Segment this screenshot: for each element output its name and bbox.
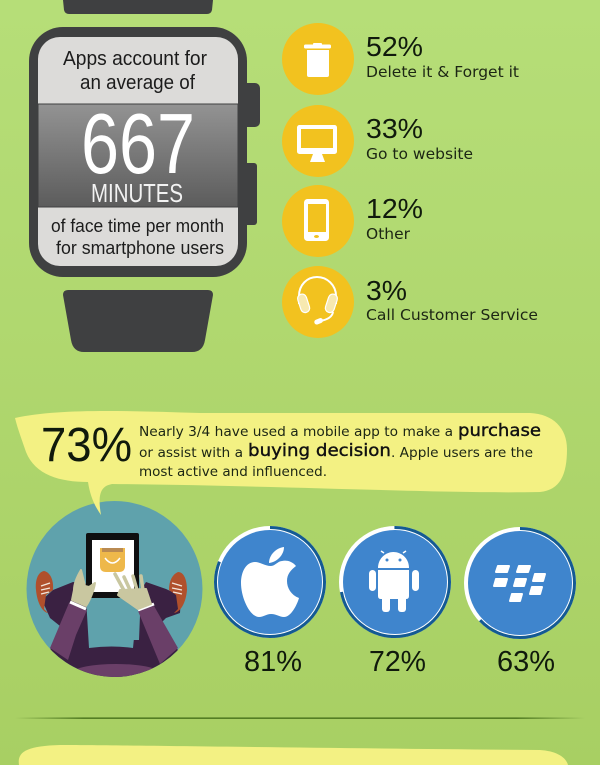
platform: apple <box>214 526 326 678</box>
minutes number: 667 <box>81 97 195 192</box>
label: Delete it & Forget it <box>366 63 519 81</box>
percentage: 72% <box>369 646 426 678</box>
icon: trash can <box>282 23 354 95</box>
bubble text: or assist with a <box>139 445 243 461</box>
watch <box>29 0 260 352</box>
label: Go to website <box>366 145 473 163</box>
percentage: 12% <box>366 193 423 224</box>
platform: android <box>339 526 451 678</box>
progress ring 72% <box>339 526 451 638</box>
bubble text: Nearly 3/4 have used a mobile app to make a <box>139 424 453 440</box>
progress ring 63% <box>464 527 576 639</box>
watch case <box>29 27 247 277</box>
cuffs <box>70 602 154 610</box>
watch text top <box>63 48 207 94</box>
bottom speech bubble <box>19 745 568 765</box>
percentage: 52% <box>366 31 423 62</box>
big percentage: 73% <box>41 419 132 472</box>
watch text bottom: for smartphone users <box>56 237 224 258</box>
watch text bottom: of face time per month <box>51 215 224 236</box>
stat: delete it <box>282 23 519 95</box>
icon: apple <box>241 547 299 617</box>
watch screen <box>38 37 238 266</box>
icon: headset <box>282 266 354 338</box>
percentage: 3% <box>366 275 407 306</box>
stat: other <box>282 185 423 257</box>
platform: blackberry <box>464 527 576 678</box>
percentage: 63% <box>497 646 555 678</box>
stat: go to website <box>282 105 473 177</box>
icon: android <box>369 551 419 612</box>
bubble text: purchase <box>458 421 541 441</box>
bubble text: buying decision <box>248 441 391 461</box>
bubble text: . Apple users are the <box>391 445 533 461</box>
lap <box>78 664 153 677</box>
speech bubble <box>15 411 567 515</box>
shopping bag <box>100 548 125 572</box>
label: Call Customer Service <box>366 306 538 324</box>
percentage: 33% <box>366 113 423 144</box>
sleeves <box>50 603 178 664</box>
watch text top: Apps account for <box>63 48 207 70</box>
shoes <box>36 571 187 613</box>
icon: blackberry <box>494 566 545 601</box>
icon: monitor <box>282 105 354 177</box>
bubble text <box>139 421 541 480</box>
teal gap between arms <box>86 603 134 648</box>
watch text top: an average of <box>80 72 195 94</box>
hands <box>72 570 151 609</box>
watch strap top <box>63 0 213 14</box>
watch buttons <box>240 83 260 225</box>
minutes label: MINUTES <box>91 178 183 208</box>
stat: call customer service <box>282 266 538 338</box>
progress ring 81% <box>214 526 326 638</box>
percentage: 81% <box>244 646 302 678</box>
illustration: person using tablet <box>26 501 202 690</box>
watch strap bottom <box>63 290 213 352</box>
watch text bottom <box>51 215 224 258</box>
bubble text: most active and influenced. <box>139 464 327 480</box>
tablet <box>86 533 139 598</box>
legs and torso <box>44 582 180 677</box>
label: Other <box>366 225 411 243</box>
icon: phone <box>282 185 354 257</box>
